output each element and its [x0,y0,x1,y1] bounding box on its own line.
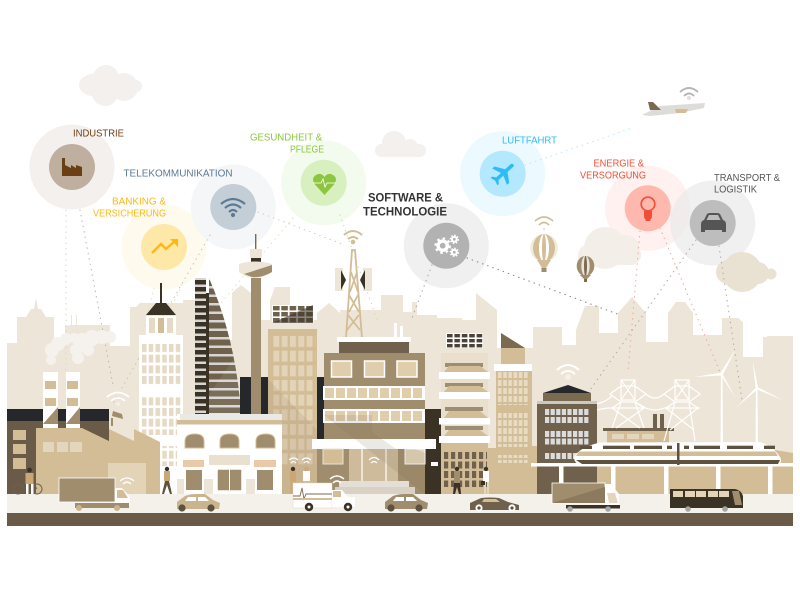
label: Transport: TRANSPORT & [714,173,780,184]
cloud: centre [375,131,426,157]
elevated railway [531,463,793,494]
low tan block and slim tower [431,333,540,494]
bus [670,489,743,512]
chimney: left [43,372,58,428]
smoke [45,330,116,365]
pedestrians: couple with wifi [289,458,311,494]
icon: light bulb [641,197,655,221]
central office building [312,323,441,494]
car: tan [177,494,220,512]
wifi: office [557,365,579,374]
label: Energie: ENERGIE & [594,159,644,170]
observation tower [239,234,272,414]
circle: Luftfahrt [460,131,545,216]
icon: heart [313,174,336,195]
label: Software: TECHNOLOGIE [363,206,447,218]
balloon: small [577,256,594,282]
dotted connection lines [66,128,742,405]
ambulance [293,476,355,511]
shop arched windows [185,434,275,448]
canopy [312,439,436,449]
window bands [323,386,425,423]
circle: Banking [122,204,206,290]
white tower [139,283,183,494]
balloon: large [530,217,558,272]
icon: car [701,213,726,232]
shop building [177,414,282,494]
icon: plane [487,156,521,190]
factory: dark block [7,409,109,494]
wind turbines [694,349,783,442]
cloud: right [716,252,776,292]
icon: gears [436,235,458,256]
pedestrian: near shop [162,467,172,494]
wifi office building [537,365,597,494]
large windows row [332,361,417,377]
person with bicycle [13,468,42,494]
truck: right [552,483,620,512]
icon: wifi [221,199,245,216]
balcony windows and awnings [445,363,483,430]
label: Banking: BANKING & [112,197,166,208]
train [574,442,781,465]
circle: Transport [670,180,755,266]
label: Industrie: INDUSTRIE [73,129,124,140]
skyline background [7,285,793,494]
circle: Industrie [30,124,114,210]
label: Transport: LOGISTIK [714,185,757,196]
small factory [603,414,674,443]
label: Gesundheit: PFLEGE [290,144,324,155]
pedestrian: woman [453,467,461,494]
circle: Energie [605,166,690,251]
label: Banking: VERSICHERUNG [93,208,166,219]
camera with wifi [107,392,129,426]
glass entrance [349,449,398,481]
car: medium [385,494,428,512]
label: Gesundheit: GESUNDHEIT & [250,133,322,144]
circle: Software [404,203,489,288]
factory: sawtooth hall [36,428,160,494]
airplane [642,88,705,116]
icon: factory [62,158,82,176]
pedestrian: man with bag [481,467,489,494]
white balconies [439,372,490,443]
icon: rising chart [152,239,178,253]
curved sail tower [195,278,240,414]
wifi: balloon [535,217,553,230]
label: Energie: VERSORGUNG [580,170,646,181]
label: Software: SOFTWARE & [368,191,444,204]
label: Luftfahrt: LUFTFAHRT [502,136,557,147]
labels [73,129,780,219]
pylons [597,380,700,441]
circle: Gesundheit [281,140,366,225]
wifi: entrance [369,458,379,463]
cloud: top left [79,65,142,106]
wifi: mast [344,231,362,243]
radio mast [335,231,372,338]
cloud: behind energy circle [578,227,641,269]
steps [335,481,415,494]
sector circles [30,124,755,290]
tan mid band [530,446,793,494]
chimney: right [66,372,80,428]
truck: left [59,478,134,511]
ground [7,494,793,526]
label: Telekommunikation: TELEKOMMUNIKATION [124,169,232,180]
tan building with solar panels [268,305,317,494]
balcony building [439,333,490,494]
car: dark sedan [470,498,519,512]
circle: Telekommunikation [191,164,276,250]
wifi: ambulance [330,476,344,483]
shop awnings [183,460,276,467]
